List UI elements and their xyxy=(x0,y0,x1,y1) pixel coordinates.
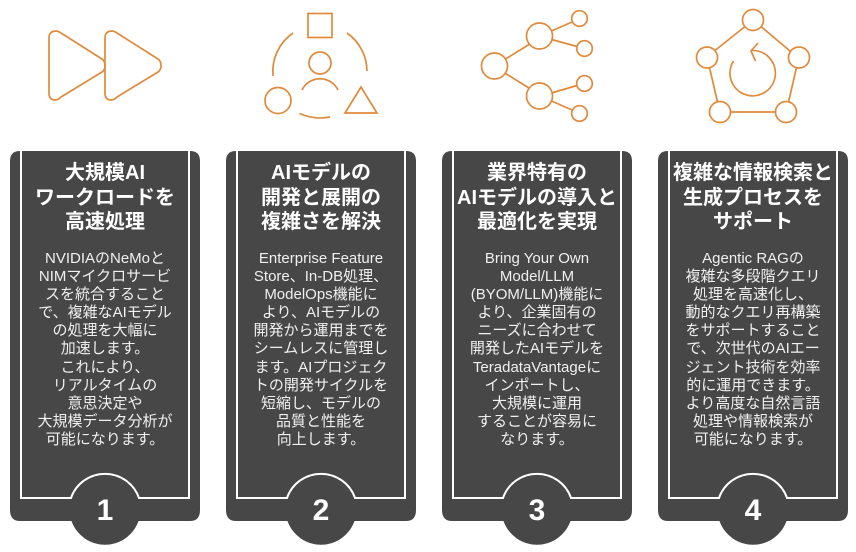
text block: ModelOps機能に xyxy=(264,286,378,303)
text block: より、AIモデルの xyxy=(262,304,380,321)
heading: 最適化を実現 xyxy=(477,211,597,233)
text block: の処理を大幅に xyxy=(52,322,158,339)
heading: 大規模AI xyxy=(65,162,145,184)
text block: 向上します。 xyxy=(277,431,365,448)
text block: TeradataVantageに xyxy=(473,359,601,376)
text block: (BYOM/LLM)機能に xyxy=(471,286,603,303)
text block: より高度な自然言語 xyxy=(686,395,820,412)
panel 2 xyxy=(226,151,416,545)
heading: ワークロードを xyxy=(35,186,175,208)
heading: 複雑な情報検索と xyxy=(673,162,833,184)
text block: 可能になります。 xyxy=(46,431,164,448)
text block: 品質と性能を xyxy=(276,413,366,430)
text block: これにより、 xyxy=(60,359,150,376)
heading xyxy=(457,162,617,233)
text block: Agentic RAGの xyxy=(702,250,804,267)
text block: 可能になります。 xyxy=(694,431,812,448)
heading: 高速処理 xyxy=(65,211,145,233)
text block xyxy=(37,250,172,448)
text block: 動的なクエリ再構築 xyxy=(685,304,820,321)
text block: NVIDIAのNeMoと xyxy=(45,250,165,267)
heading: 業界特有の xyxy=(487,162,587,184)
text block: Enterprise Feature xyxy=(259,250,383,267)
heading: AIモデルの導入と xyxy=(457,186,617,208)
text block xyxy=(685,250,820,448)
heading: 開発と展開の xyxy=(261,186,381,208)
heading xyxy=(261,162,381,233)
text block: トの開発サイクルを xyxy=(254,377,388,394)
heading: 生成プロセスを xyxy=(683,186,823,208)
number: 3 xyxy=(529,494,545,527)
text block: をサポートすること xyxy=(685,322,820,339)
icon: fast forward xyxy=(49,31,161,100)
text block: Bring Your Own xyxy=(485,250,589,267)
text block: 大規模に運用 xyxy=(492,395,582,412)
text block: 複雑な多段階クエリ xyxy=(685,268,820,285)
heading xyxy=(673,162,833,233)
text block: ジェント技術を効率 xyxy=(685,359,820,376)
text block: 大規模データ分析が xyxy=(37,413,172,430)
text block xyxy=(470,250,604,448)
text block: 短縮し、モデルの xyxy=(261,395,381,412)
text block: Store、In-DB処理、 xyxy=(254,268,388,285)
text block: 開発から運用までを xyxy=(253,322,388,339)
text block: 処理を高速化し、 xyxy=(693,286,813,303)
text block: することが容易に xyxy=(477,413,597,430)
number: 1 xyxy=(97,494,113,527)
text block: 加速します。 xyxy=(61,340,149,357)
text block: NIMマイクロサービ xyxy=(39,268,171,285)
heading: 複雑さを解決 xyxy=(261,211,381,233)
text block xyxy=(253,250,388,448)
heading: AIモデルの xyxy=(271,162,371,184)
text block: ニーズに合わせて xyxy=(477,322,597,339)
heading: サポート xyxy=(713,211,793,233)
panel 3 xyxy=(442,151,632,545)
text block: シームレスに管理し xyxy=(254,340,388,357)
number: 4 xyxy=(745,494,761,527)
text block: 開発したAIモデルを xyxy=(470,340,604,357)
text block: 的に運用できます。 xyxy=(686,377,820,394)
text block: 意思決定や xyxy=(67,395,142,412)
icon: pentagon cycle xyxy=(696,10,810,122)
text block: で、次世代のAIエー xyxy=(686,340,820,357)
text block: より、企業固有の xyxy=(477,304,597,321)
panel 4 xyxy=(658,151,848,545)
text block: なります。 xyxy=(500,431,574,448)
number: 2 xyxy=(313,494,329,527)
text block: インポートし、 xyxy=(484,377,590,394)
text block: リアルタイムの xyxy=(53,377,157,394)
text block: スを統合すること xyxy=(45,286,165,303)
text block: Model/LLM xyxy=(500,268,574,285)
panel 1 xyxy=(10,151,200,545)
text block: ます。AIプロジェク xyxy=(255,359,387,376)
icon: branching network xyxy=(482,11,592,121)
text block: で、複雑なAIモデル xyxy=(38,304,172,321)
icon: person with shapes xyxy=(265,14,377,118)
text block: 処理や情報検索が xyxy=(693,413,813,430)
heading xyxy=(35,162,175,233)
